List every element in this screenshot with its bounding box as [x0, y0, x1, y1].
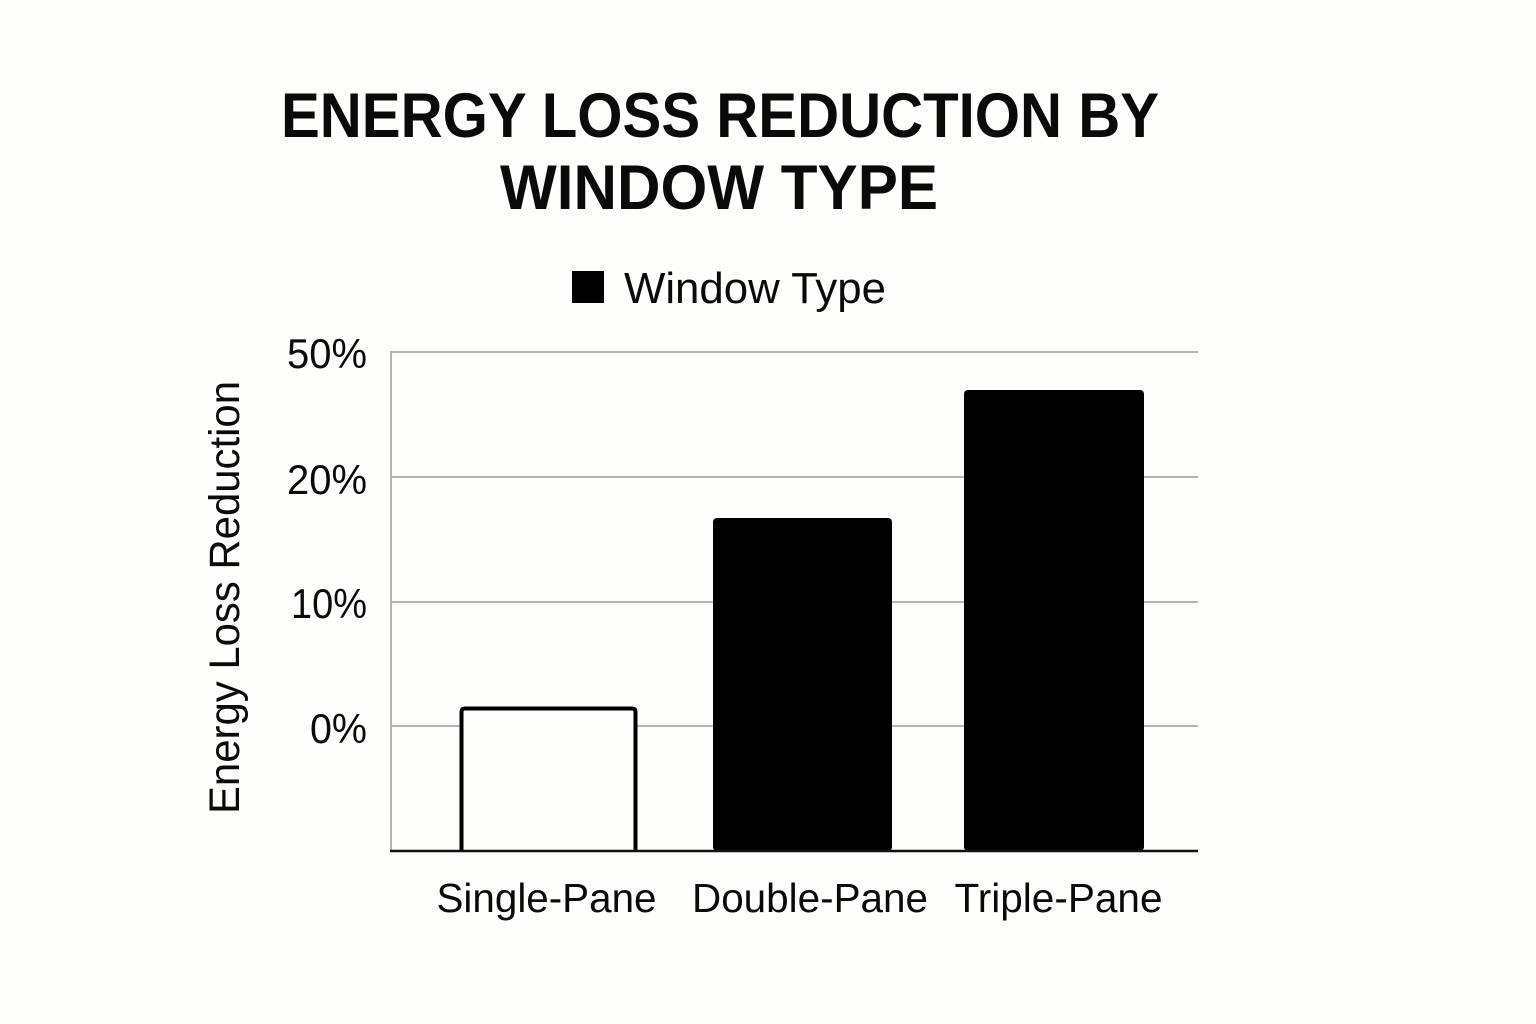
- x axis line: [390, 850, 1198, 852]
- grid lines: [390, 351, 1198, 851]
- x axis labels: Double-Pane: [692, 875, 928, 921]
- bar: double-pane: [713, 518, 892, 851]
- y axis labels: 0%: [310, 705, 367, 752]
- title: [281, 81, 1159, 223]
- bar: single-pane: [462, 708, 636, 851]
- legend: Window Type: [624, 264, 886, 313]
- y axis labels: 10%: [291, 580, 367, 627]
- x axis labels: [436, 875, 1162, 921]
- y axis title: Energy Loss Reduction: [201, 381, 249, 814]
- x axis labels: Triple-Pane: [954, 875, 1162, 921]
- y axis labels: [287, 330, 367, 752]
- title: WINDOW TYPE: [500, 153, 938, 223]
- bar: triple-pane: [964, 390, 1144, 851]
- x axis labels: Single-Pane: [436, 875, 656, 921]
- y axis labels: 50%: [287, 330, 367, 377]
- y axis labels: 20%: [287, 456, 367, 503]
- title: ENERGY LOSS REDUCTION BY: [281, 81, 1159, 151]
